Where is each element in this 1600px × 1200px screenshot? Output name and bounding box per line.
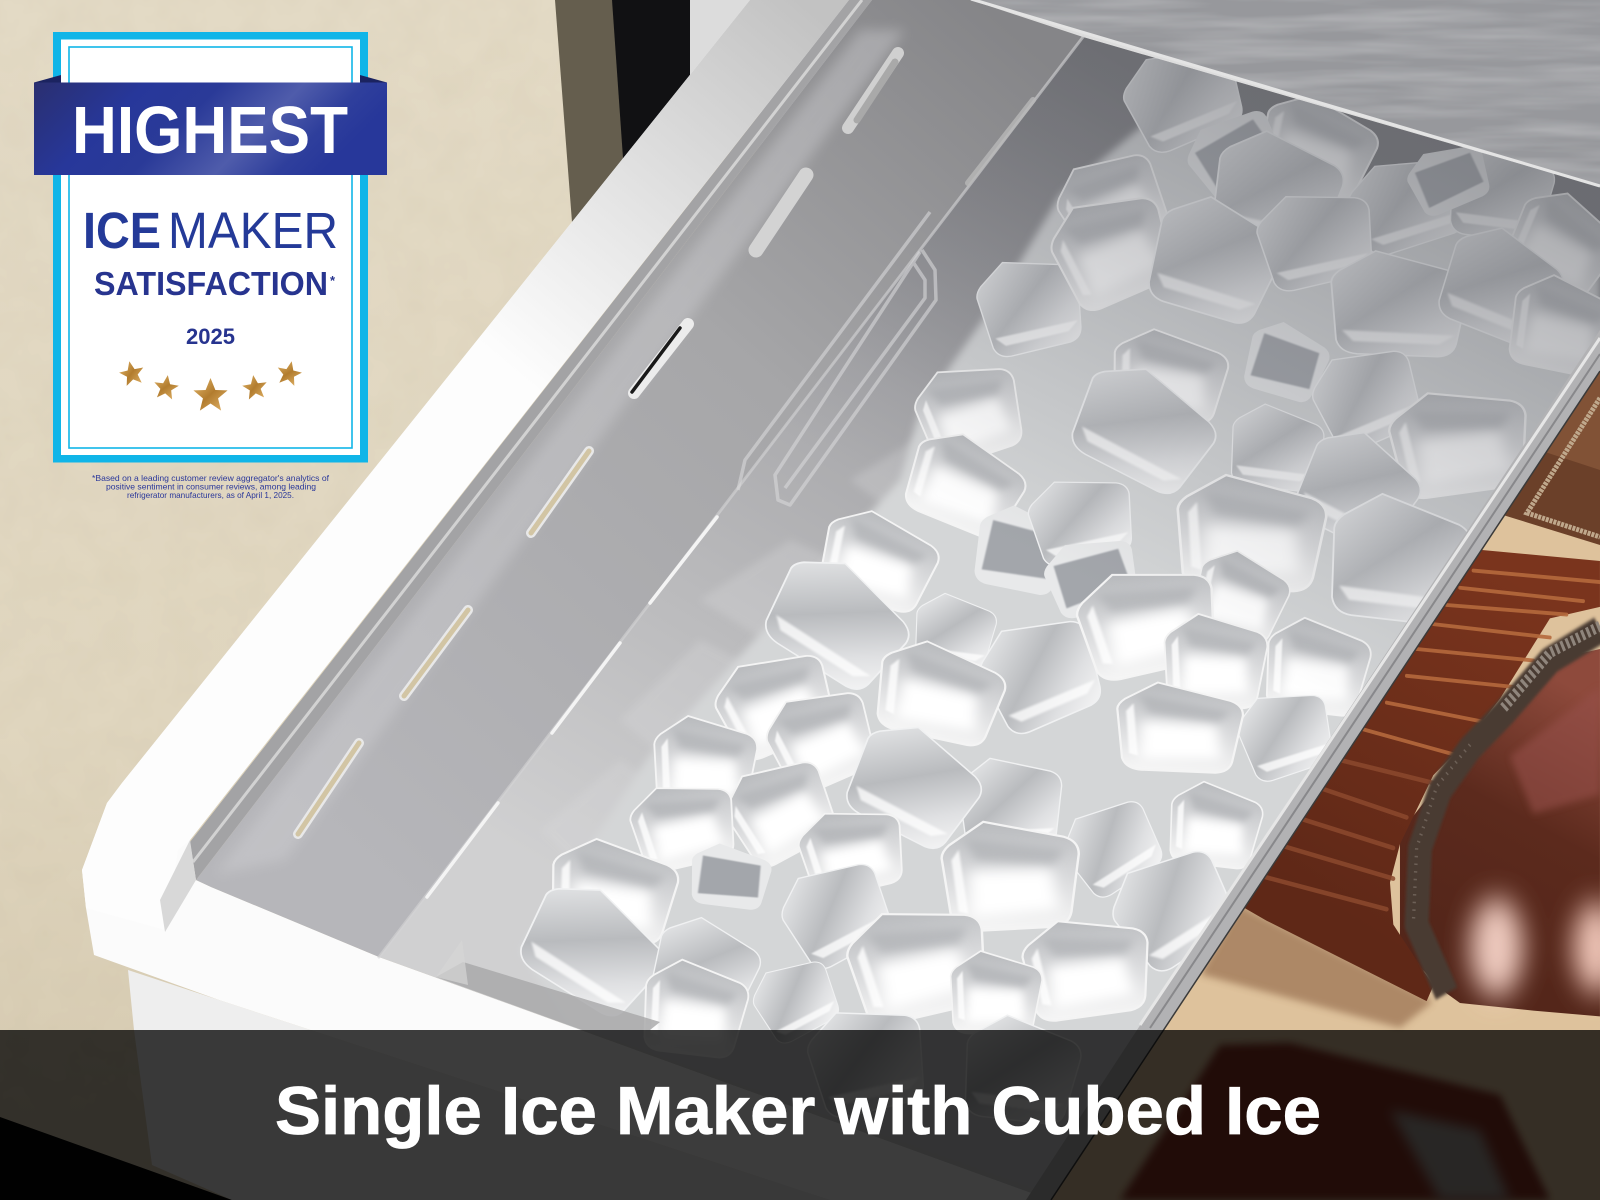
heading: SATISFACTION: SATISFACTION — [94, 265, 328, 302]
footnote — [92, 474, 330, 500]
clear bin handle — [738, 212, 936, 505]
dark gap behind drawer — [555, 0, 760, 270]
slot 1 — [848, 53, 898, 128]
five gold stars — [117, 359, 304, 411]
ice cubes — [506, 33, 1600, 1132]
ice base mass — [626, 126, 1600, 1030]
caption bar overlay — [0, 1030, 1600, 1200]
award badge — [34, 32, 387, 462]
year: 2025 — [186, 324, 235, 349]
ice cube pile — [520, 38, 1600, 1124]
ribbon folds — [34, 75, 387, 82]
ghost cubes seen through the bin wall — [540, 430, 960, 880]
chocolate top — [1400, 649, 1600, 1016]
cupcake wrapper — [1240, 550, 1600, 1001]
slot 5 — [404, 610, 468, 696]
cake shape under the caption bar — [1120, 1043, 1550, 1200]
ice bin interior — [379, 37, 1600, 1200]
badge frame — [53, 32, 368, 462]
slot 2 — [756, 175, 806, 250]
silver bin rim on the right — [1026, 330, 1600, 1200]
glossy highlights — [1470, 898, 1600, 997]
interior side panel — [196, 0, 1083, 957]
beige wall background — [0, 0, 760, 1200]
ribbon — [34, 82, 387, 175]
drawer front body — [128, 970, 830, 1200]
heading: ICE MAKER: MAKER — [168, 202, 338, 259]
crumbly wrapper edge — [1413, 626, 1600, 993]
brown patterned card with dotted trim — [1503, 371, 1600, 545]
light strip on panel next to groove — [215, 30, 905, 875]
beige backdrop — [1052, 516, 1600, 1200]
heading: SATISFACTION: * — [330, 273, 336, 288]
slots in the side panel — [298, 53, 898, 834]
clear bin ridge with light streaks — [379, 37, 1083, 957]
caption text: Single Ice Maker with Cubed Ice — [275, 1073, 1321, 1149]
footnote: *Based on a leading customer review aggregator's analytics of — [92, 474, 330, 483]
brushed metal top shelf — [971, 0, 1600, 187]
heading: ICE MAKER: ICE — [83, 202, 161, 259]
footnote: refrigerator manufacturers, as of April 1, 2025. — [127, 491, 294, 500]
groove beside the rim — [160, 0, 872, 932]
shadow below the wrapper — [1200, 905, 1433, 1028]
slot 3 — [632, 324, 688, 393]
slot 6 — [298, 743, 359, 834]
front bin lip — [436, 940, 660, 1030]
heading: ICE MAKER — [83, 202, 338, 259]
footnote: positive sentiment in consumer reviews, among leading — [106, 482, 316, 492]
shadow dimming the rear ice — [888, 38, 1600, 656]
heading: HIGHEST: HIGHEST — [72, 93, 348, 168]
chocolate cupcake photo behind the drawer — [1040, 370, 1600, 1200]
slot 4 — [531, 451, 589, 533]
white drawer rim — [82, 0, 1051, 1200]
black floor corner — [0, 1117, 232, 1200]
